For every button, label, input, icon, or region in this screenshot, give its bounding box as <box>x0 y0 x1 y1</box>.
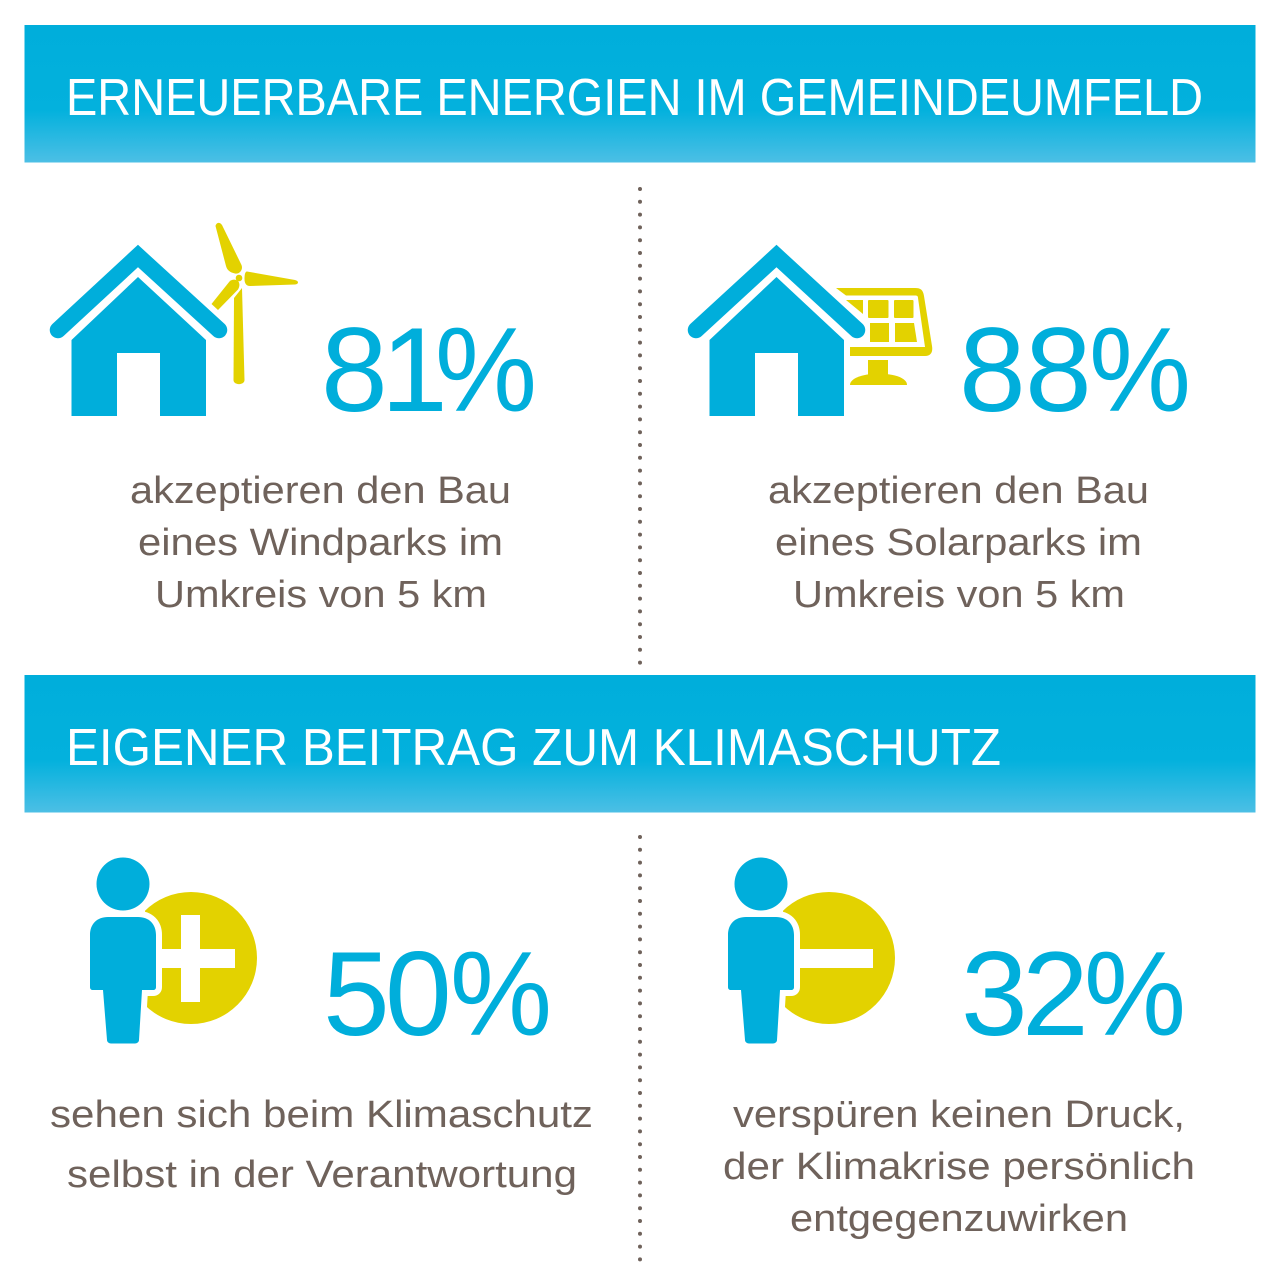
stat: 32%: 32 <box>961 927 1089 1061</box>
text: wind park description: eines Windparks im <box>138 522 503 564</box>
divider: bottom dotted line <box>638 837 642 1263</box>
text: wind park description: akzeptieren den Bau <box>130 470 511 512</box>
text: pressure description <box>723 1094 1195 1240</box>
banner: renewable energy heading <box>24 25 1256 162</box>
stat: 50%: 50 <box>323 927 452 1061</box>
text: solar park description <box>768 470 1149 616</box>
text: responsibility description: sehen sich beim Klimaschutz <box>50 1094 593 1136</box>
text: wind park description <box>130 470 511 616</box>
text: responsibility description <box>50 1094 593 1196</box>
stat: 50% <box>323 927 552 1061</box>
text: wind park description: Umkreis von 5 km <box>155 574 487 616</box>
icon: house with solar panel <box>696 256 932 416</box>
panel: solar park acceptance <box>696 256 1191 616</box>
stat: 81%: 81 <box>321 303 448 437</box>
panel: no personal pressure <box>723 858 1195 1240</box>
text: solar park description: eines Solarparks im <box>775 522 1142 564</box>
text: pressure description: der Klimakrise persönlich <box>723 1146 1195 1188</box>
stat: 88%: % <box>1089 303 1191 437</box>
icon: person with plus <box>90 858 257 1044</box>
stat: 88%: 88 <box>959 303 1092 437</box>
panel: wind park acceptance <box>58 223 537 616</box>
text: responsibility description: selbst in der Verantwortung <box>67 1154 577 1196</box>
panel: own responsibility <box>50 858 593 1196</box>
text: solar park description: akzeptieren den Bau <box>768 470 1149 512</box>
stat: 50%: % <box>450 927 552 1061</box>
stat: 32% <box>961 927 1186 1061</box>
stat: 88% <box>959 303 1191 437</box>
divider: top dotted line <box>638 189 642 668</box>
text: solar park description: Umkreis von 5 km <box>793 574 1125 616</box>
text: pressure description: entgegenzuwirken <box>790 1198 1128 1240</box>
text: pressure description: verspüren keinen Druck, <box>733 1094 1185 1136</box>
banner: climate contribution heading <box>24 675 1256 812</box>
stat: 81% <box>321 303 537 437</box>
heading: Eigener Beitrag zum Klimaschutz: EIGENER BEITRAG ZUM KLIMASCHUTZ <box>66 719 1001 777</box>
icon: person with minus <box>728 858 895 1044</box>
stat: 81%: % <box>435 303 537 437</box>
icon: house with wind turbine <box>58 223 298 416</box>
stat: 32%: % <box>1084 927 1186 1061</box>
